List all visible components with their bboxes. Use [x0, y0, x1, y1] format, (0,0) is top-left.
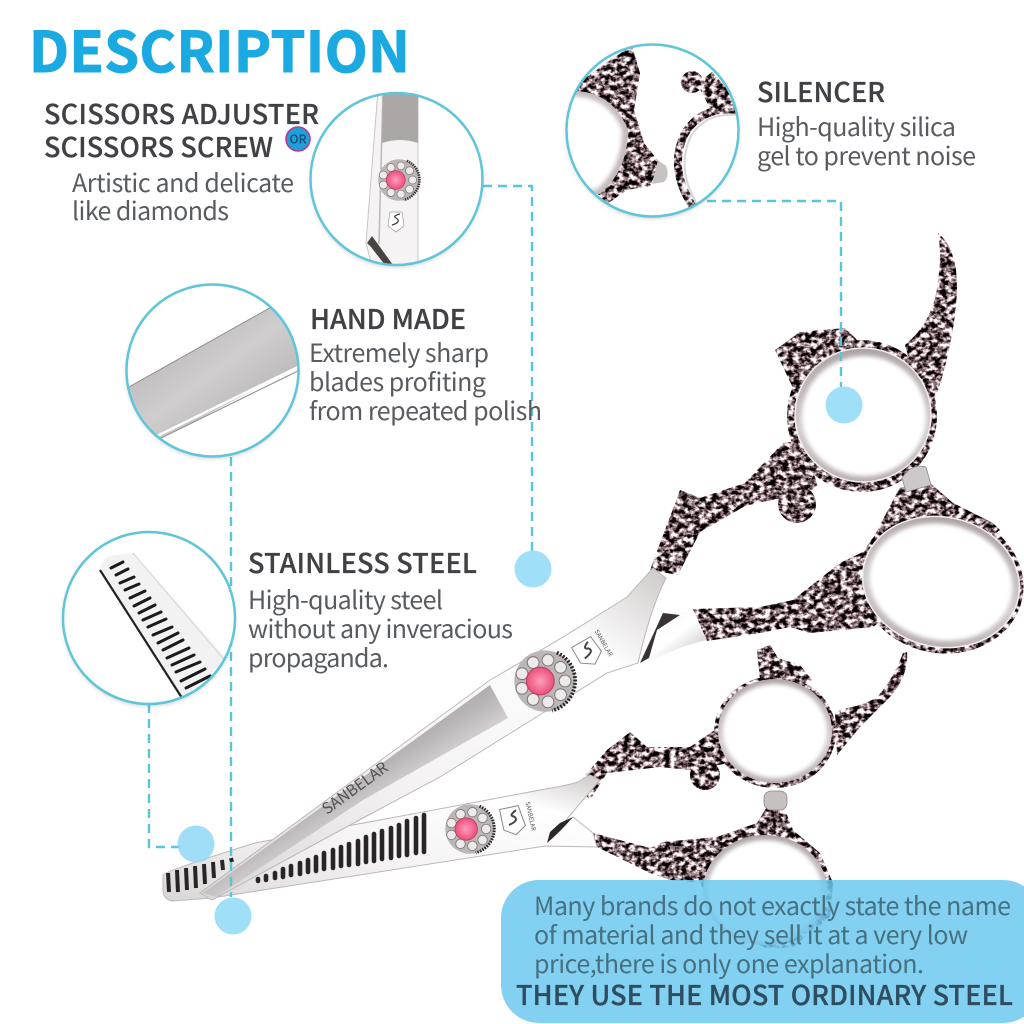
inset comb photo: [100, 553, 228, 698]
marker dot: silencer: [826, 386, 862, 424]
shank shadow: [640, 613, 680, 663]
teeth: [258, 815, 424, 881]
body: High-quality silica: [757, 108, 956, 144]
callout emphasis: THEY USE THE MOST ORDINARY STEEL: [516, 974, 1013, 1013]
brand name: SANBELAR: [317, 756, 392, 819]
body line 2: gel to prevent noise: [757, 137, 976, 173]
inset background: [566, 44, 738, 216]
inset ring: [310, 93, 482, 265]
screw with gems: [445, 804, 495, 854]
callout body: Many brands do not exactly state the name: [534, 887, 1011, 923]
marker dot: hand made: [214, 898, 252, 934]
brand logo: SANBELAR: [593, 628, 615, 658]
body line 2: like diamonds: [72, 192, 229, 228]
stud: [764, 791, 787, 810]
text block: scissors adjuster: [44, 93, 319, 228]
blade body: [200, 568, 666, 900]
straight shears handles: [650, 233, 1024, 669]
inset handles photo: [574, 48, 736, 207]
inset ring: [566, 44, 738, 216]
heading: SILENCER: [757, 71, 885, 110]
title: DESCRIPTION: [29, 8, 410, 89]
heading line 2: SCISSORS SCREW: [44, 126, 273, 165]
thinning blade body: [163, 775, 600, 901]
body: High-quality steel: [248, 581, 443, 617]
inset background: [126, 284, 298, 456]
marker dot: adjuster: [514, 550, 552, 588]
callout body line 2: of material and they sell it at a very low: [534, 916, 968, 952]
heading: SCISSORS ADJUSTER: [44, 93, 319, 132]
dark notch: [547, 817, 573, 843]
scissors: thinning shears: [163, 645, 907, 949]
ring holes: [718, 679, 832, 783]
marker dot: stainless steel: [178, 826, 214, 862]
brand logo: [570, 628, 615, 671]
panel: silencer inset: [556, 44, 740, 216]
inset ring: [126, 284, 298, 456]
screw with gems: [514, 650, 576, 712]
text block: silencer: [757, 71, 976, 173]
ring holes: [795, 348, 931, 482]
inset background: [310, 93, 482, 265]
lower shank: [640, 612, 707, 663]
tip teeth: [168, 858, 232, 892]
inset background: [63, 532, 235, 704]
brand logo: SANBELAR: [524, 801, 539, 832]
panel: stainless steel inset: [63, 532, 235, 704]
body: Artistic and delicate: [72, 164, 294, 200]
inset blade photo: [129, 308, 298, 438]
thinning shears handles: [577, 645, 907, 949]
panel: hand made inset: [120, 284, 305, 456]
badge: or: [286, 127, 310, 151]
stud: [902, 466, 931, 492]
heading: HAND MADE: [310, 298, 466, 337]
panel: scissors adjuster inset: [310, 90, 482, 270]
callout body line 3: price,there is only one explanation.: [534, 945, 924, 981]
connector: stainless steel: [149, 704, 182, 847]
body line 2: without any inveracious: [248, 610, 513, 646]
callout box: [501, 880, 1024, 1023]
body: Extremely sharp: [309, 334, 489, 370]
brand logo: [499, 801, 539, 837]
heading: STAINLESS STEEL: [248, 542, 477, 581]
body line 3: from repeated polish: [309, 392, 542, 428]
text block: hand made: [309, 298, 542, 428]
scissors: straight shears: [200, 233, 1024, 900]
callout: [501, 880, 1024, 1023]
body line 3: propaganda.: [248, 639, 389, 675]
connector: silencer: [707, 201, 841, 390]
badge: or: OR: [290, 130, 307, 148]
text block: stainless steel: [248, 542, 513, 675]
body line 2: blades profiting: [309, 363, 486, 399]
connector: hand made: [230, 457, 232, 897]
connector: adjuster: [483, 186, 532, 552]
inset ring: [63, 532, 235, 704]
blade hollow grind: [203, 685, 508, 897]
inset shank photo: [366, 90, 420, 270]
